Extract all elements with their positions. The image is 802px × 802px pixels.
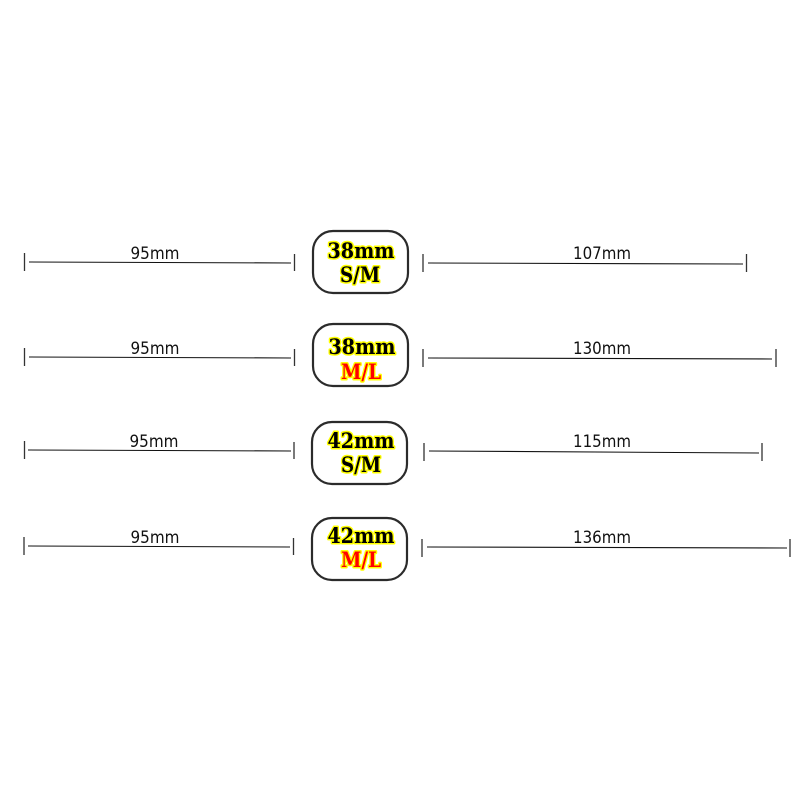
left dimension line 95mm [24,528,294,555]
row 4: 42mm M/L [24,518,790,580]
right dimension line 107mm: 107mm [573,244,631,263]
size badge 42mm M/L: 42mm [328,523,394,548]
size badge 38mm S/M: S/M [340,262,380,287]
left dimension line 95mm: 95mm [130,339,180,358]
size badge 42mm S/M: S/M [341,452,381,477]
size badge 42mm M/L [312,518,407,580]
right dimension line 107mm [423,244,746,272]
right dimension line 115mm: 115mm [573,432,631,451]
size badge 42mm S/M: 42mm [328,428,394,453]
size badge 38mm M/L [313,324,408,386]
left dimension line 95mm [24,339,294,366]
size badge 42mm S/M [312,422,407,484]
size badge 42mm M/L: M/L [341,547,381,572]
right dimension line 130mm [423,339,776,367]
right dimension line 136mm [422,528,790,557]
size badge 38mm S/M [313,231,408,293]
size badge 38mm S/M: 38mm [328,238,394,263]
right dimension line 115mm [424,432,762,461]
left dimension line 95mm [24,432,294,459]
left dimension line 95mm: 95mm [130,528,180,547]
left dimension line 95mm: 95mm [130,432,178,451]
size badge 38mm M/L: M/L [341,359,381,384]
right dimension line 130mm: 130mm [573,339,631,358]
right dimension line 136mm: 136mm [573,528,631,547]
size badge 38mm M/L: 38mm [328,334,396,359]
row 1: 38mm S/M [24,231,746,293]
left dimension line 95mm: 95mm [130,244,180,263]
row 2: 38mm M/L [24,324,776,386]
left dimension line 95mm [24,244,294,271]
row 3: 42mm S/M [24,422,762,484]
